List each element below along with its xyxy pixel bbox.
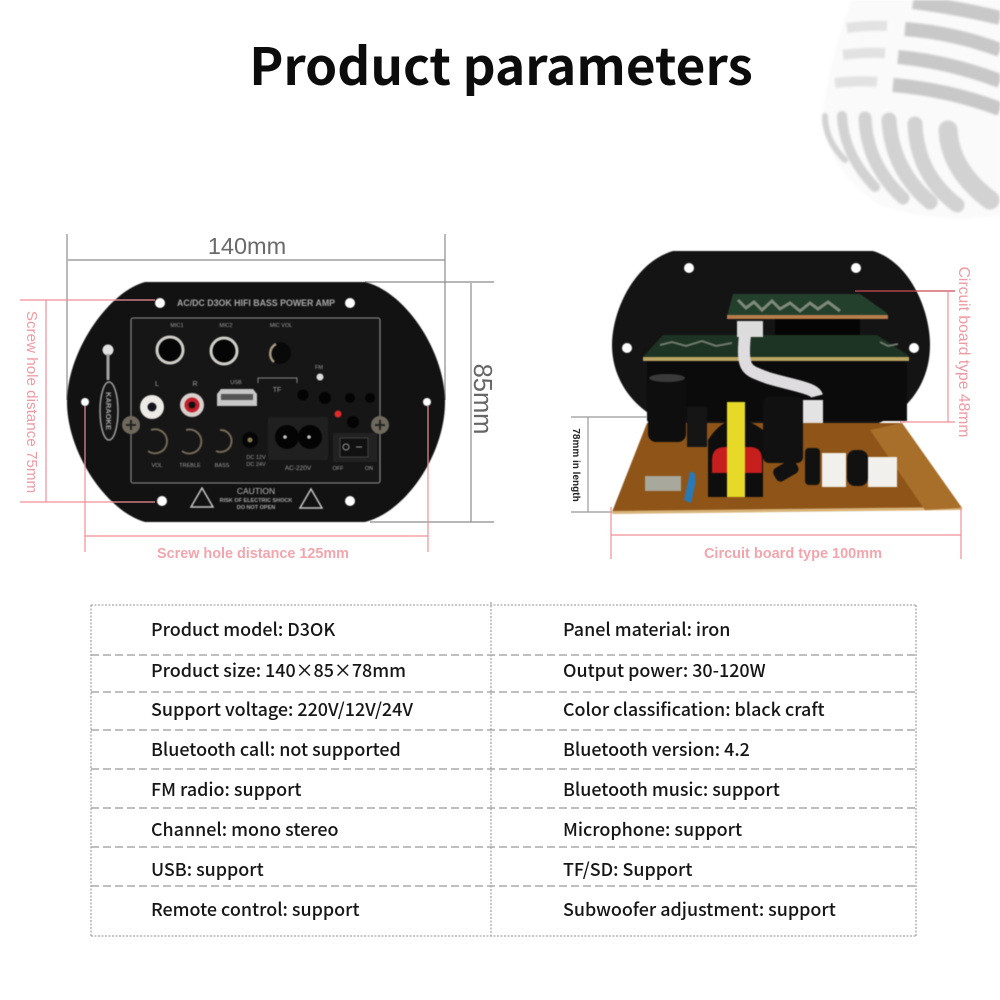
tone knobs <box>148 429 232 454</box>
mounting holes <box>81 298 431 506</box>
panel labels: MIC1 <box>170 323 184 329</box>
dimension: circuit board type 48mm <box>855 267 972 437</box>
RCA sockets <box>140 393 204 419</box>
rocker switch <box>333 433 377 462</box>
dimension: screw hole distance 125mm <box>85 406 428 562</box>
left column specs <box>151 616 413 922</box>
ribbon cable <box>737 321 823 427</box>
AC power socket <box>268 417 328 460</box>
panel labels: TREBLE <box>179 463 201 469</box>
white connectors <box>822 453 897 487</box>
right column specs: Bluetooth version: 4.2 <box>563 736 750 762</box>
large capacitor <box>648 374 686 442</box>
panel labels: TF <box>273 387 281 394</box>
control panel outline <box>131 318 380 483</box>
panel labels: OFF <box>332 466 344 472</box>
spec table grid <box>91 602 916 936</box>
plate heading: AC/DC D3OK HIFI BASS POWER AMP <box>177 298 335 308</box>
title: Product parameters <box>249 25 753 100</box>
rear plate <box>612 251 930 425</box>
heat sink <box>647 360 907 421</box>
left column specs: USB: support <box>151 856 264 882</box>
caution notice <box>191 486 322 511</box>
right column specs: Bluetooth music: support <box>563 776 780 802</box>
DC socket <box>242 432 258 448</box>
small regulator <box>687 407 707 447</box>
panel labels: ON <box>365 466 373 472</box>
karaoke logo: KARAOKE <box>104 392 113 430</box>
USB socket <box>217 389 257 406</box>
upper circuit board <box>727 294 888 346</box>
base circuit board <box>612 423 962 512</box>
dimension: screw hole distance 75mm: Screw hole distance 75mm <box>23 311 40 493</box>
dimension: screw hole distance 75mm <box>20 300 155 502</box>
dimension: circuit board type 100mm: Circuit board type 100mm <box>704 546 882 562</box>
dimension: 140mm width <box>67 233 445 400</box>
panel labels: USB <box>230 380 242 386</box>
left column specs: Bluetooth call: not supported <box>151 736 401 762</box>
left column specs: Support voltage: 220V/12V/24V <box>151 696 413 722</box>
dimension: 140mm width: 140mm <box>208 233 286 259</box>
rear plate holes <box>622 263 919 353</box>
left column specs: Channel: mono stereo <box>151 816 339 842</box>
capacitors <box>763 397 868 486</box>
panel labels: DC 12V <box>246 455 266 461</box>
caution notice: RISK OF ELECTRIC SHOCK <box>220 498 292 504</box>
right column specs: Microphone: support <box>563 816 742 842</box>
dimension: 78mm in length: 78mm in length <box>570 428 581 502</box>
mic volume knob <box>269 342 291 364</box>
left column specs: Remote control: support <box>151 896 360 922</box>
panel labels: MIC2 <box>219 323 233 329</box>
right column specs <box>563 616 836 922</box>
lower circuit board <box>643 335 909 361</box>
panel labels: R <box>192 381 198 388</box>
caution notice: DO NOT OPEN <box>237 505 275 511</box>
dimension: 85mm height <box>365 282 496 522</box>
panel labels: DC 24V <box>246 462 266 468</box>
panel labels: FM <box>315 365 323 371</box>
panel: rear view with circuit boards <box>612 251 962 514</box>
right column specs: TF/SD: Support <box>563 856 692 882</box>
dimension: circuit board type 100mm <box>611 507 961 562</box>
panel labels: L <box>155 381 159 388</box>
right column specs: Panel material: iron <box>563 616 730 642</box>
panel: specification table <box>151 616 836 922</box>
transformer <box>708 402 763 497</box>
right column specs: Color classification: black craft <box>563 696 825 722</box>
fuse and blue capacitor <box>645 472 695 503</box>
panel labels: BASS <box>215 463 230 469</box>
panel labels: MIC VOL <box>270 323 292 329</box>
panel labels <box>151 323 373 472</box>
right column specs: Subwoofer adjustment: support <box>563 896 836 922</box>
panel labels: AC-220V <box>285 465 312 472</box>
panel labels: VOL <box>151 463 163 469</box>
karaoke logo <box>100 344 118 440</box>
small switches and screws <box>122 374 389 434</box>
left column specs: Product size: 140×85×78mm <box>151 657 406 683</box>
dimension: 78mm in length <box>570 417 647 512</box>
dimension: screw hole distance 125mm: Screw hole distance 125mm <box>157 546 349 562</box>
microphone jacks <box>157 337 237 364</box>
left column specs: Product model: D3OK <box>151 616 335 642</box>
amplifier front plate <box>67 282 445 522</box>
dimension: circuit board type 48mm: Circuit board type 48mm <box>955 267 972 437</box>
dimension: 85mm height: 85mm <box>468 364 496 434</box>
right column specs: Output power: 30-120W <box>563 657 766 683</box>
caution notice: CAUTION <box>237 486 275 496</box>
left column specs: FM radio: support <box>151 776 302 802</box>
